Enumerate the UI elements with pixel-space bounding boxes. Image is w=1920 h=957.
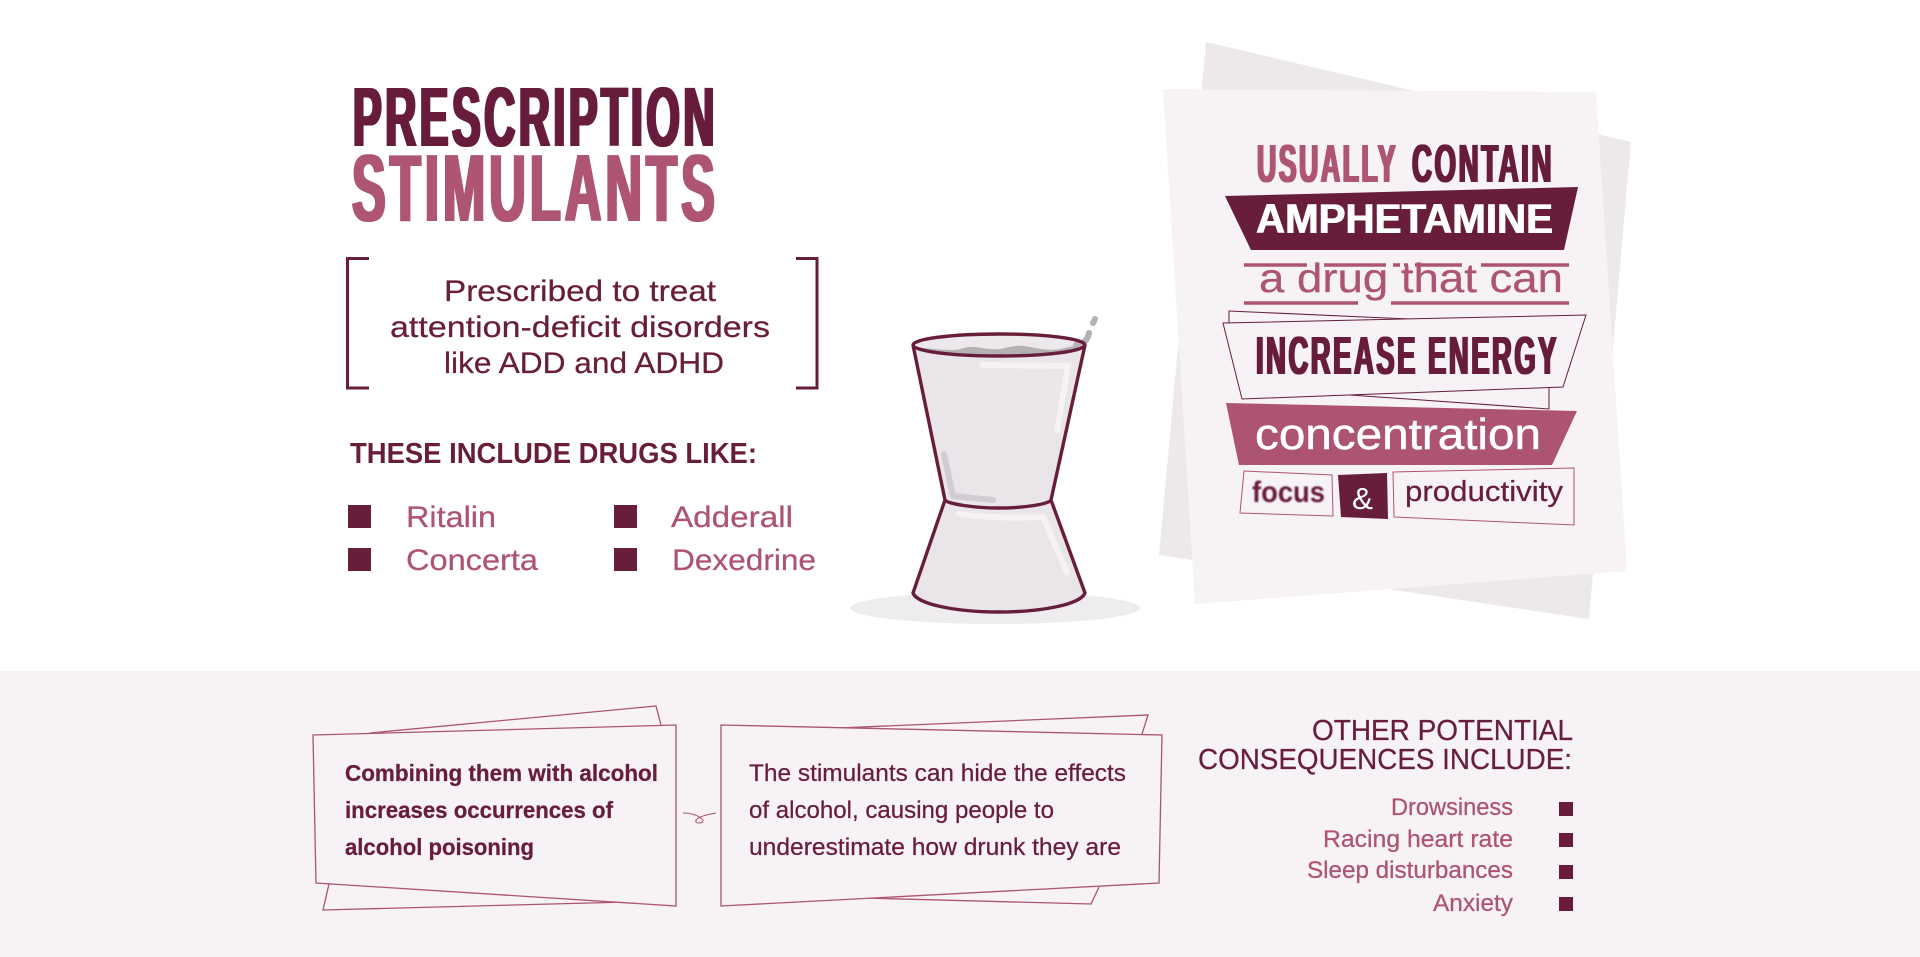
- heading: other potential consequences: CONSEQUENCES INCLUDE:: [1198, 744, 1572, 776]
- poster banner: concentration: [1226, 403, 1577, 465]
- title: PRESCRIPTION: [353, 70, 718, 164]
- poster banner: amphetamine: [1225, 187, 1578, 250]
- poster tag: focus: focus: [1252, 476, 1325, 509]
- consequences list: Racing heart rate: [1323, 826, 1513, 853]
- heading: these include drugs like: THESE INCLUDE DRUGS LIKE:: [350, 438, 757, 470]
- poster line: a drug that can: a drug that can: [1259, 255, 1563, 301]
- drug list: Adderall: [671, 501, 793, 534]
- title: STIMULANTS: [352, 135, 719, 242]
- poster banner: concentration: concentration: [1255, 410, 1541, 459]
- icon: jigger with splash: [850, 319, 1140, 624]
- poster tag: ampersand: &: [1352, 481, 1373, 516]
- poster tag: productivity: [1393, 468, 1574, 525]
- poster line: usually contain: CONTAIN: [1412, 134, 1554, 194]
- callout: combining with alcohol: increases occurrences of: [345, 797, 613, 823]
- panel: bottom band: [0, 671, 1920, 957]
- consequences list: [1307, 794, 1573, 917]
- poster tag: ampersand: [1338, 473, 1388, 519]
- bracketed description: [348, 258, 817, 388]
- drug list: Dexedrine: [672, 544, 816, 577]
- consequences list: Anxiety: [1433, 890, 1513, 917]
- bracketed description: attention-deficit disorders: [390, 311, 770, 344]
- consequences list: Drowsiness: [1391, 794, 1513, 821]
- callout: combining with alcohol: Combining them with alcohol: [345, 760, 658, 786]
- callout: hides the effects: The stimulants can hide the effects: [749, 760, 1126, 787]
- icon: squiggle connector: [683, 813, 716, 823]
- drug list: Ritalin: [406, 501, 496, 534]
- poster box: increase energy: INCREASE ENERGY: [1256, 326, 1559, 386]
- poster tag: productivity: productivity: [1405, 476, 1564, 508]
- title: [352, 70, 719, 242]
- heading: other potential consequences: OTHER POTENTIAL: [1312, 715, 1573, 747]
- panel: stacked paper poster: [1159, 42, 1631, 619]
- heading: other potential consequences: [1198, 715, 1573, 776]
- callout: hides the effects: of alcohol, causing people to: [749, 797, 1054, 824]
- callout: combining with alcohol: [313, 706, 676, 910]
- poster line: usually contain: USUALLY: [1257, 134, 1398, 194]
- drug list: Concerta: [406, 544, 538, 577]
- drug list: [348, 501, 816, 577]
- poster banner: amphetamine: AMPHETAMINE: [1256, 195, 1553, 242]
- callout: combining with alcohol: alcohol poisoning: [345, 834, 534, 860]
- callout: hides the effects: [721, 715, 1162, 906]
- bracketed description: Prescribed to treat: [444, 275, 717, 308]
- poster box: increase energy: [1223, 311, 1586, 409]
- consequences list: Sleep disturbances: [1307, 857, 1513, 884]
- poster tag: focus: [1240, 471, 1333, 516]
- callout: hides the effects: underestimate how drunk they are: [749, 834, 1121, 861]
- bracketed description: like ADD and ADHD: [444, 347, 724, 380]
